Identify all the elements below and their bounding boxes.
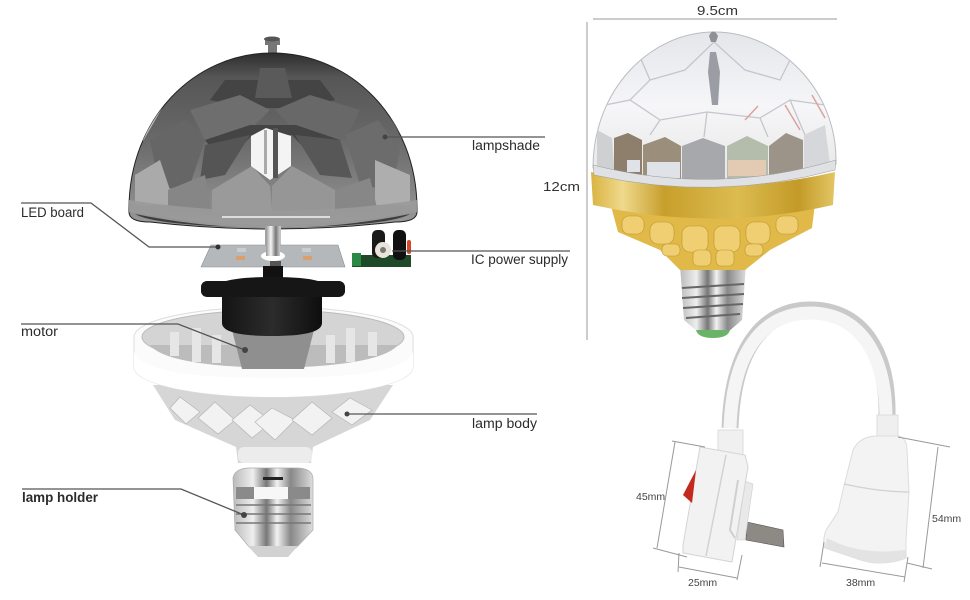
lamp body bowl bbox=[134, 307, 413, 463]
rear tab bbox=[737, 481, 753, 540]
label: lamp body: lamp body bbox=[472, 416, 537, 431]
IC power supply module bbox=[352, 230, 411, 267]
dimension: 45mm: 45mm bbox=[636, 491, 665, 503]
label: lamp holder bbox=[22, 489, 247, 518]
gold ribbed body bbox=[608, 195, 816, 270]
dimension: 54mm: 54mm bbox=[932, 513, 961, 525]
label: lamp body bbox=[344, 412, 537, 431]
dimension: 38mm bbox=[820, 542, 908, 589]
dimension: 38mm: 38mm bbox=[846, 577, 875, 589]
white socket adapter bbox=[636, 310, 961, 589]
dimension: 54mm bbox=[898, 437, 961, 569]
dimension: 45mm bbox=[636, 441, 705, 557]
label: lampshade: lampshade bbox=[472, 138, 540, 153]
label: motor: motor bbox=[21, 324, 59, 339]
dimension: 25mm: 25mm bbox=[688, 577, 717, 589]
dimension: 12cm height: 12cm bbox=[543, 179, 580, 194]
label: LED board bbox=[21, 203, 220, 250]
label: LED board: LED board bbox=[21, 205, 84, 220]
bulb socket bbox=[824, 415, 909, 563]
red rocker switch bbox=[683, 470, 696, 503]
metal prong bbox=[746, 522, 784, 547]
label: motor bbox=[21, 324, 248, 353]
LED board bbox=[201, 226, 345, 267]
label: IC power supply: IC power supply bbox=[471, 252, 568, 267]
clear faceted dome bbox=[593, 32, 836, 187]
label: lamp holder: lamp holder bbox=[22, 490, 99, 505]
lampshade dome bbox=[129, 36, 417, 229]
label: lampshade bbox=[382, 134, 545, 153]
plug housing bbox=[683, 430, 748, 562]
dimension: 9.5cm width: 9.5cm bbox=[697, 3, 738, 18]
motor bbox=[201, 266, 345, 336]
central shaft bbox=[265, 226, 281, 260]
exploded lamp diagram bbox=[21, 36, 570, 557]
bulb screw base bbox=[680, 265, 746, 338]
gold ring bbox=[591, 172, 835, 218]
flexible neck bbox=[730, 310, 887, 428]
assembled gold disco bulb bbox=[543, 3, 837, 340]
dimension: 25mm bbox=[678, 553, 742, 589]
lamp holder screw base bbox=[233, 468, 313, 557]
